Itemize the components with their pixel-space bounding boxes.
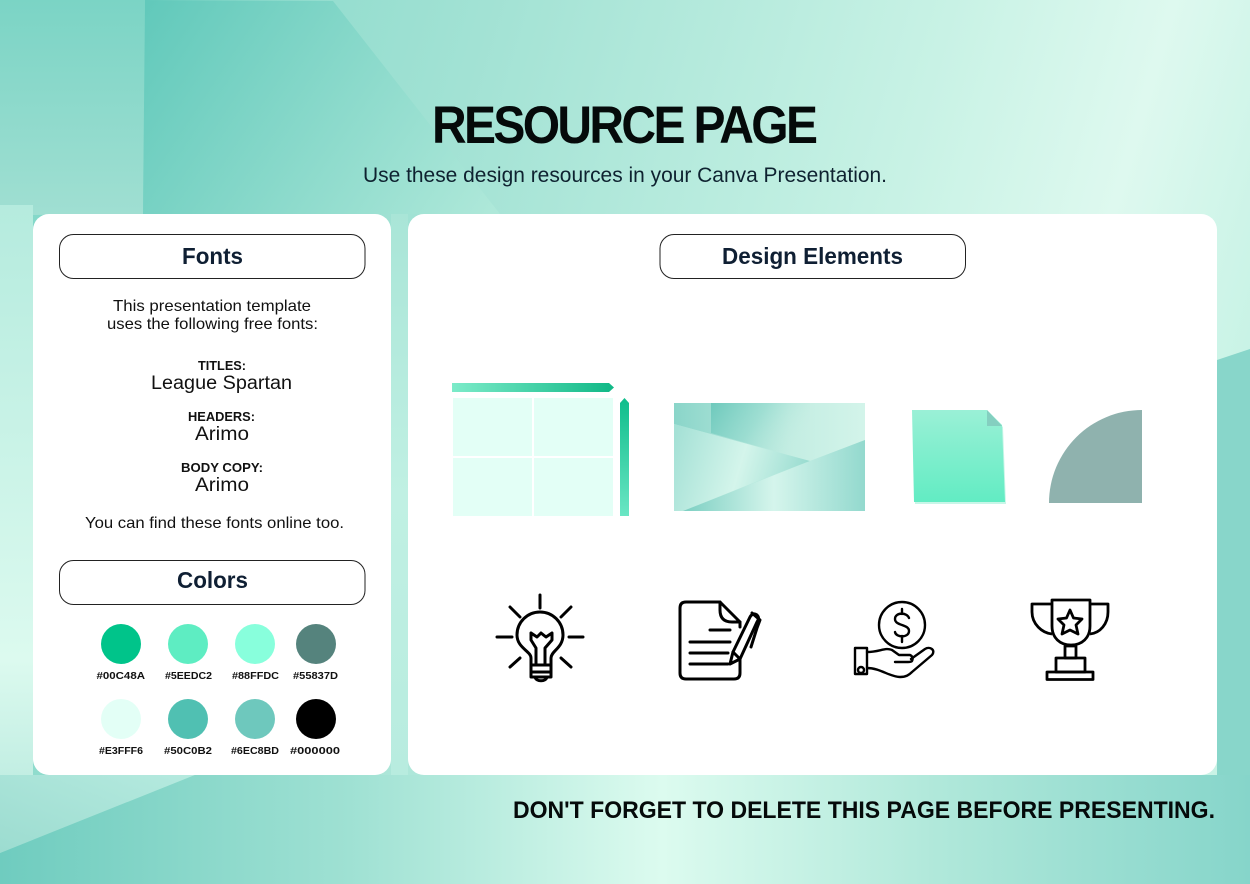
- font list: headers: Arimo: [195, 424, 249, 445]
- swatch: 000000: #000000: [290, 746, 341, 757]
- font list: headers: HEADERS:: [188, 409, 255, 424]
- subtitle: Use these design resources in your Canva Presentation.: [363, 164, 887, 187]
- heading: design elements: [660, 234, 966, 278]
- element: sticky note: [912, 410, 1006, 504]
- swatch: E3FFF6: #E3FFF6: [99, 746, 143, 757]
- element: table grid with arrows: [452, 383, 629, 516]
- swatch: 88FFDC: #88FFDC: [232, 671, 279, 682]
- element: quarter circle: [1049, 410, 1142, 503]
- panel: fonts and colors: [33, 214, 391, 775]
- swatch: 5EEDC2: #5EEDC2: [165, 671, 212, 682]
- swatch: 00C48A: #00C48A: [96, 671, 145, 682]
- font list: titles: TITLES:: [198, 358, 246, 373]
- swatch: 000000: [290, 699, 341, 757]
- font list: headers: [188, 409, 255, 445]
- swatch: 5EEDC2: [165, 624, 212, 682]
- swatch: 50C0B2: [164, 699, 212, 757]
- font list: body copy: BODY COPY:: [181, 460, 263, 475]
- panel: design elements: [408, 214, 1217, 775]
- swatch: 00C48A: [96, 624, 145, 682]
- icon: hand holding coin: [855, 602, 933, 677]
- icon: trophy: [1032, 600, 1108, 680]
- swatch: 88FFDC: [232, 624, 279, 682]
- icon: light bulb: [497, 595, 583, 681]
- reminder text: DON'T FORGET TO DELETE THIS PAGE BEFORE PRESENTING.: [513, 797, 1215, 824]
- intro text: [107, 298, 318, 333]
- swatch: 55837D: #55837D: [293, 671, 338, 682]
- swatch: 55837D: [293, 624, 338, 682]
- heading: design elements: Design Elements: [722, 243, 903, 269]
- font list: titles: League Spartan: [151, 373, 292, 394]
- font list: titles: [151, 358, 292, 394]
- intro text: uses the following free fonts:: [107, 316, 318, 333]
- intro text: This presentation template: [113, 298, 311, 315]
- icon: document and pen: [680, 602, 760, 679]
- font list: body copy: [181, 460, 263, 496]
- swatch: 6EC8BD: [231, 699, 279, 757]
- element: gradient background thumbnail: [674, 403, 865, 511]
- heading: fonts: [60, 234, 365, 278]
- note: You can find these fonts online too.: [85, 515, 344, 532]
- heading: colors: [60, 560, 365, 604]
- swatch: E3FFF6: [99, 699, 143, 757]
- swatch: 6EC8BD: #6EC8BD: [231, 746, 279, 757]
- title: RESOURCE PAGE: [432, 95, 818, 155]
- heading: fonts: Fonts: [182, 243, 243, 269]
- swatch: 50C0B2: #50C0B2: [164, 746, 212, 757]
- heading: colors: Colors: [177, 567, 248, 593]
- font list: body copy: Arimo: [195, 475, 249, 496]
